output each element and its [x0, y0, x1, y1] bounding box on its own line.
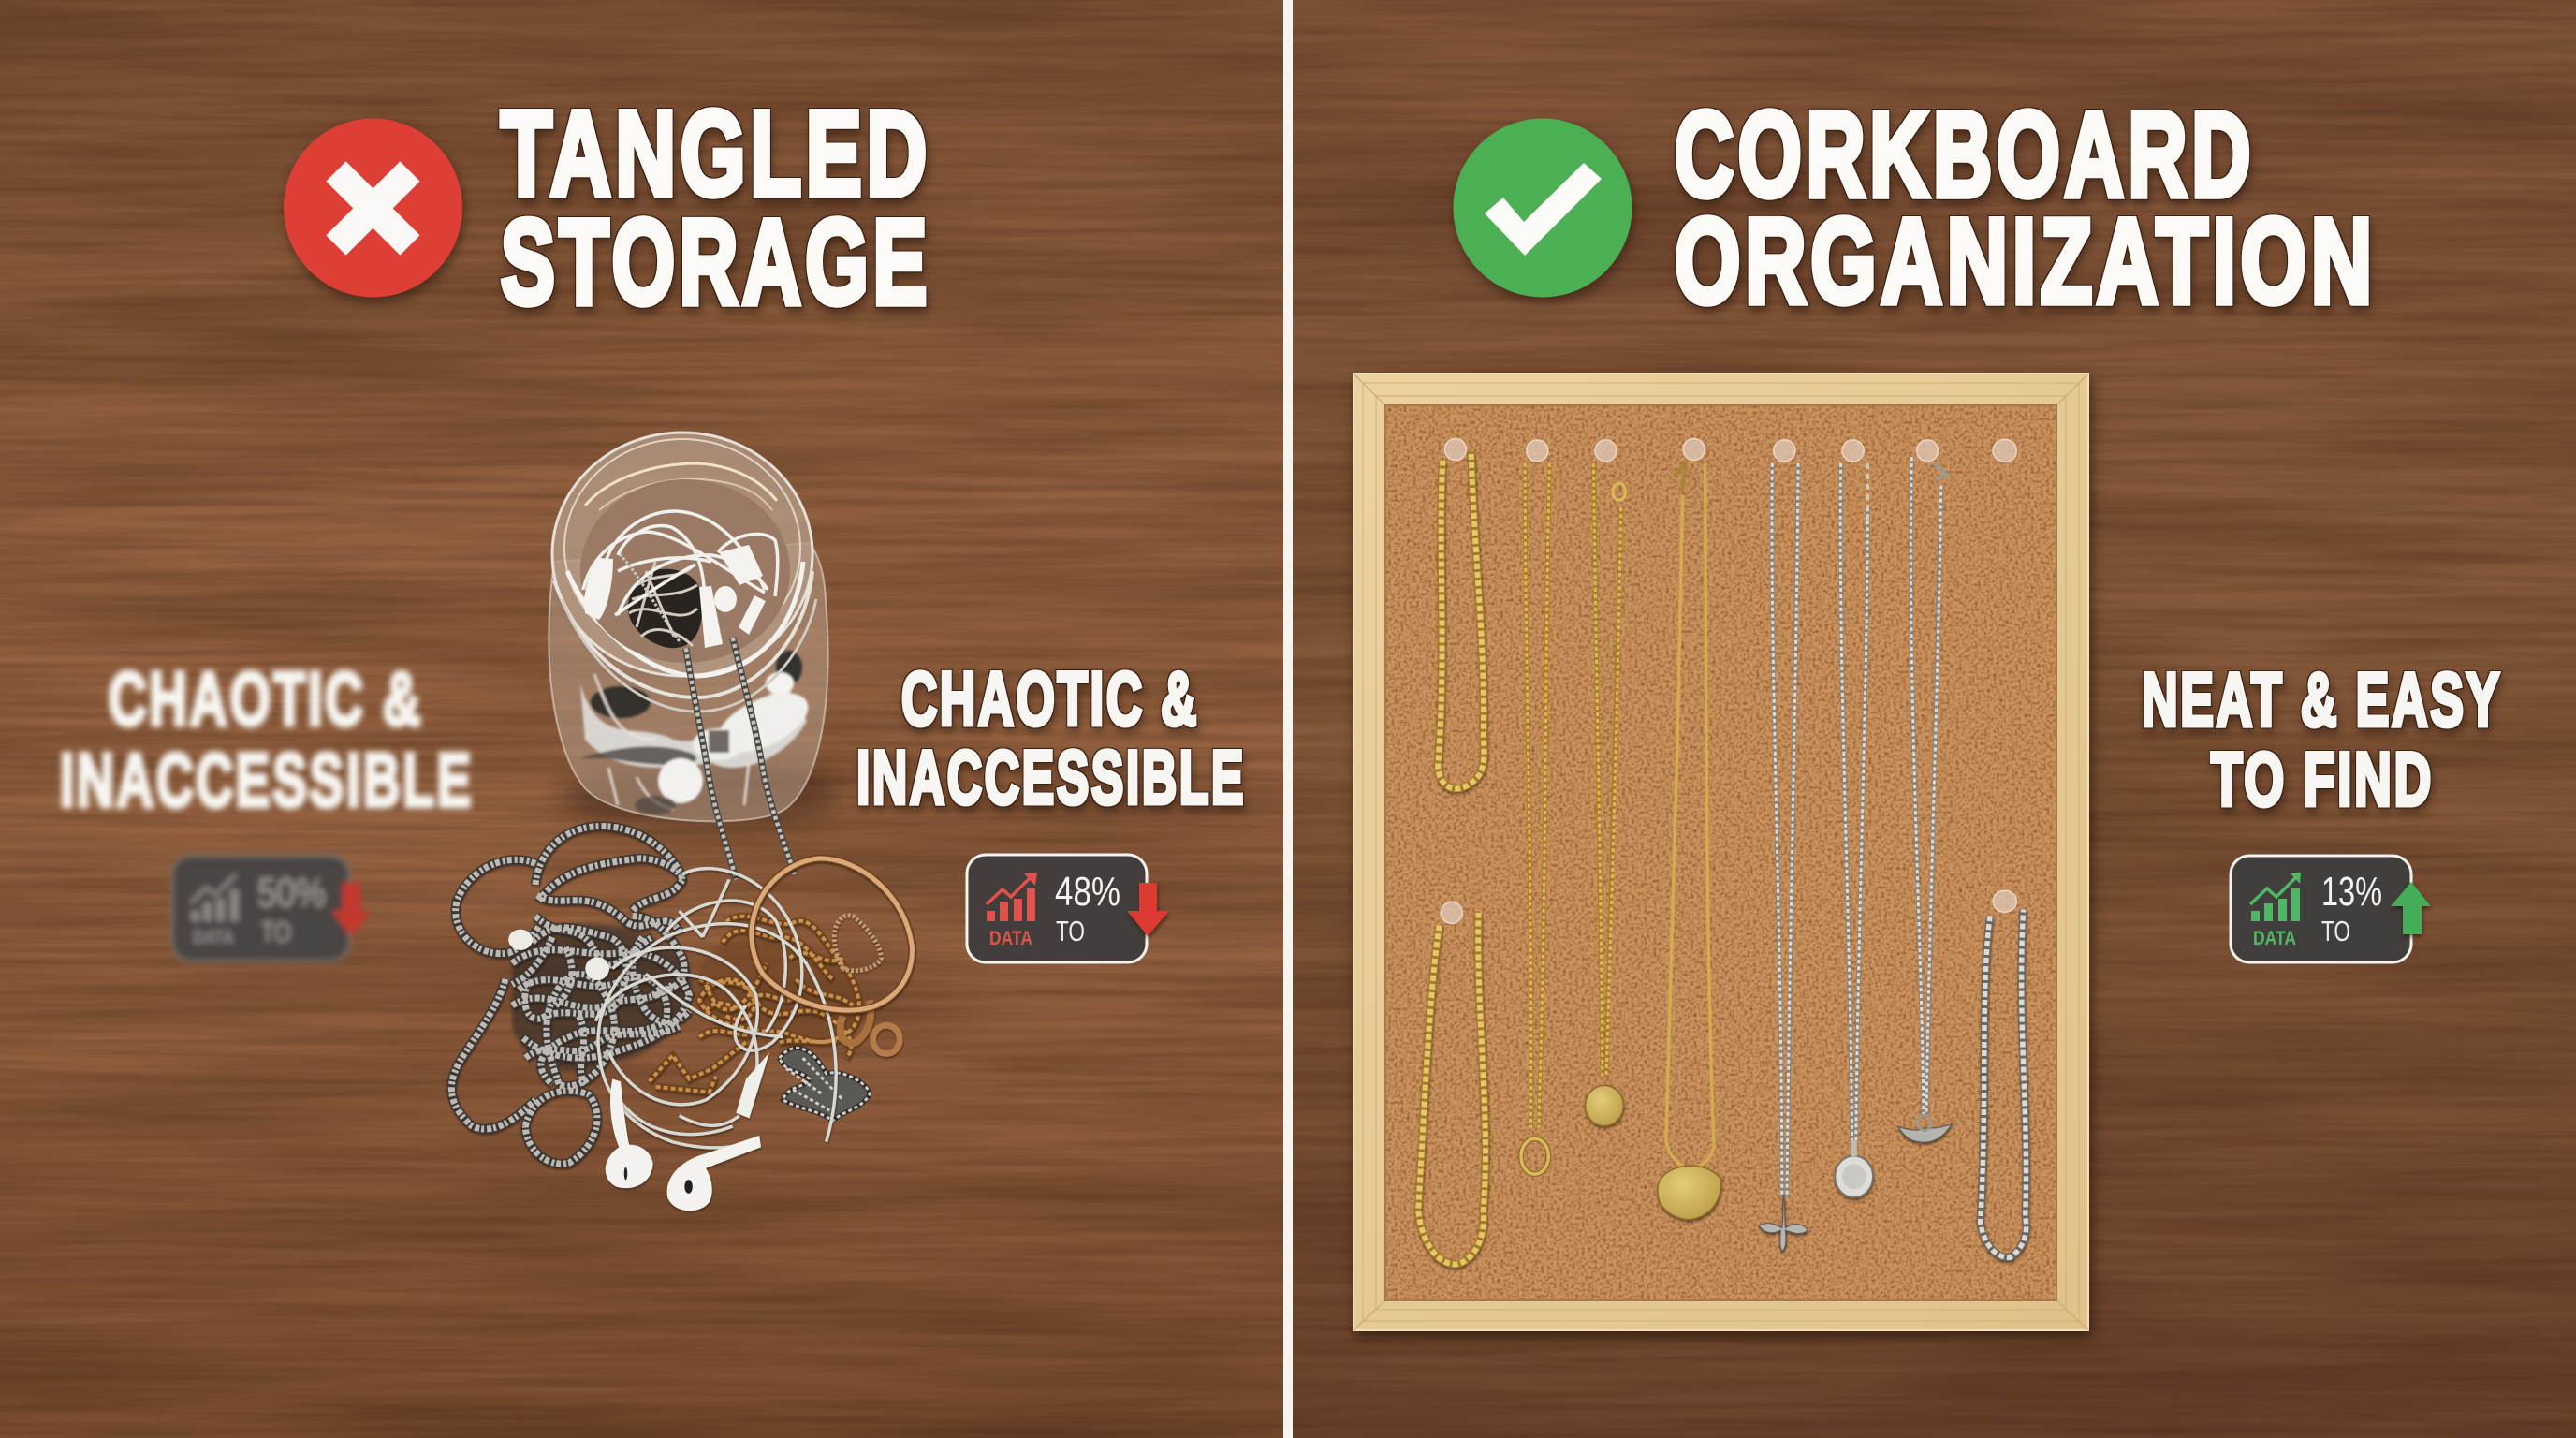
- small silver chain patch: [780, 1048, 870, 1121]
- gold chain tangle: [649, 916, 900, 1092]
- gold bracelet bottom left: [1418, 913, 1486, 1264]
- illustration: tangled chains, earbuds and bangle: [451, 638, 912, 1211]
- illustration: glass jar with earbuds: [549, 433, 842, 829]
- white cords inside jar: [583, 511, 778, 615]
- shadow under gold tangle: [699, 934, 858, 1046]
- icon: red down arrow: [1127, 883, 1169, 936]
- icon: green bar chart: [2250, 873, 2301, 921]
- jar body: [549, 543, 828, 821]
- heading: tangled storage: [501, 87, 931, 330]
- earbuds inside jar: [584, 545, 766, 648]
- corkboard with frame: [1354, 374, 2088, 1330]
- label: chaotic and inaccessible: [856, 657, 1246, 820]
- blurred label: chaotic and inaccessible: [60, 657, 474, 823]
- silver chain pile: [451, 826, 689, 1164]
- label: chaotic and inaccessible: INACCESSIBLE: [856, 736, 1246, 820]
- gold necklace with disc pendant: [1586, 463, 1625, 1126]
- dark jewelry clump inside jar: [628, 569, 702, 648]
- gold bangle: [752, 858, 912, 1010]
- shadow under silver pile: [512, 924, 691, 1070]
- jar opening interior: [580, 479, 790, 663]
- data badge: 48% red: 48%: [1055, 869, 1120, 915]
- silver necklace with bar pendant: [1898, 457, 1952, 1142]
- data badge: 48% red: DATA: [989, 928, 1032, 949]
- jar rim and neck: [552, 433, 812, 676]
- data badge: 48% red: [967, 855, 1169, 962]
- blurred data badge: 50%: [257, 870, 326, 916]
- blurred label: chaotic and inaccessible: CHAOTIC &: [109, 657, 423, 741]
- center divider: [1283, 0, 1293, 1438]
- chains hanging from jar: [686, 638, 795, 879]
- data badge: 13% green: DATA: [2253, 928, 2296, 949]
- label: chaotic and inaccessible: CHAOTIC &: [901, 657, 1199, 741]
- silver bracelet bottom right: [1981, 910, 2027, 1257]
- data badge: 48% red: TO: [1056, 915, 1085, 947]
- earbuds on table: [606, 1078, 761, 1211]
- blurred data badge: [172, 856, 372, 961]
- icon: green check circle: [1453, 118, 1632, 298]
- heading: tangled storage: STORAGE: [501, 196, 931, 330]
- blurred data badge: TO: [261, 916, 291, 948]
- label: neat and easy to find: [2142, 658, 2502, 822]
- gold snake necklace with large pendant: [1658, 463, 1721, 1220]
- panel: tangled storage wood background: [0, 0, 1288, 1438]
- data badge: 13% green: 13%: [2321, 869, 2382, 915]
- icon: green up arrow: [2391, 882, 2431, 934]
- heading: corkboard organization: [1675, 88, 2377, 329]
- icon: red bar chart: [987, 873, 1037, 921]
- panel: corkboard organization wood background: [1288, 0, 2576, 1438]
- jar shadow: [562, 762, 842, 829]
- silver necklace with watch pendant: [1835, 463, 1873, 1197]
- data badge: 13% green: TO: [2321, 915, 2350, 947]
- jar contents seen through glass: [580, 651, 817, 814]
- silver necklace with flower pendant: [1759, 463, 1808, 1252]
- gold necklace with ring pendant: [1521, 463, 1549, 1174]
- icon: red X circle: [284, 118, 462, 298]
- gold bracelet top left: [1438, 450, 1484, 788]
- heading: tangled storage: TANGLED: [501, 87, 931, 221]
- blurred label: chaotic and inaccessible: INACCESSIBLE: [60, 739, 474, 823]
- blurred data badge: DATA: [193, 927, 234, 948]
- data badge: 13% green: [2231, 856, 2431, 962]
- clear push pins: [1441, 439, 2016, 923]
- heading: corkboard organization: CORKBOARD: [1675, 88, 2255, 222]
- white earbud cords: [595, 869, 836, 1148]
- label: neat and easy to find: TO FIND: [2211, 738, 2434, 822]
